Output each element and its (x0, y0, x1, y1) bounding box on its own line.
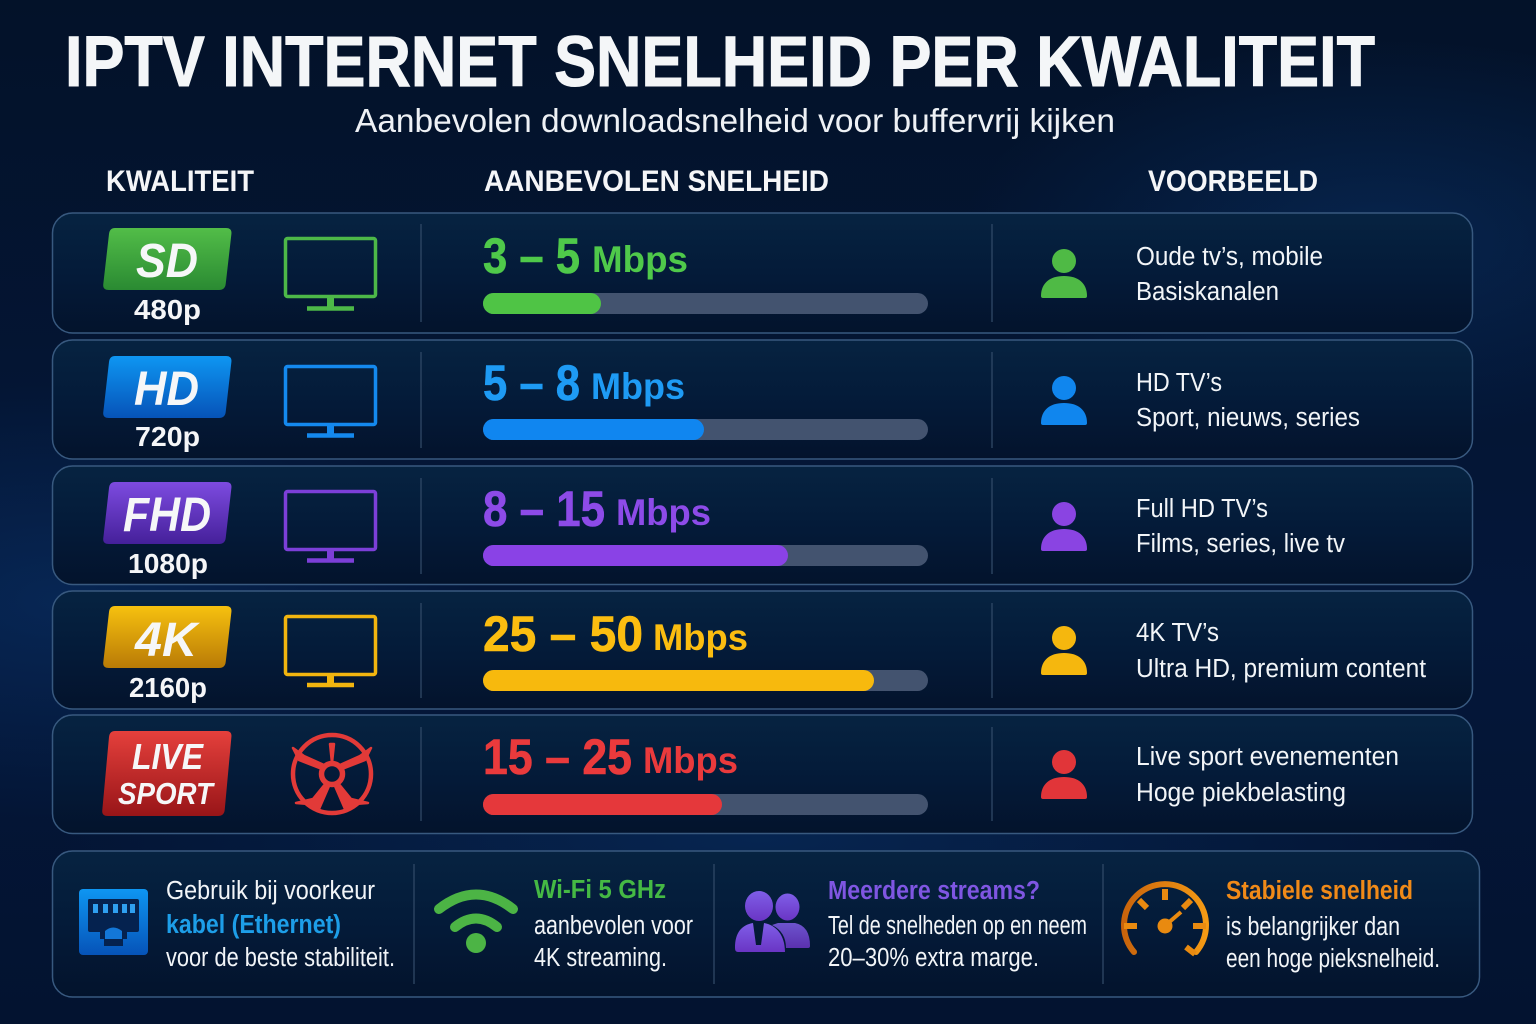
tip: multiple streams: 20–30% extra marge. (828, 944, 1039, 972)
example text: 4K (1136, 619, 1426, 683)
tip: ethernet: Gebruik bij voorkeur (166, 877, 375, 905)
resolution: 2160p: 2160p (129, 672, 207, 703)
example text: FHD (1136, 495, 1345, 558)
badge: FHD: FHD (123, 489, 211, 542)
title: IPTV INTERNET SNELHEID PER KWALITEIT (65, 23, 1375, 102)
speed: 15-25 Mbps: Mbps (643, 740, 738, 781)
icon: green person (1041, 249, 1087, 298)
speed: 3-5 Mbps: Mbps (592, 239, 688, 280)
panel: SD row (52, 213, 1472, 333)
example text: 4K: 4K TV’s (1136, 619, 1219, 647)
example text: 4K: Ultra HD, premium content (1136, 655, 1426, 683)
badge: HD: HD (134, 363, 199, 416)
icon: yellow tv (286, 616, 376, 685)
icon: soccer ball (293, 735, 371, 813)
resolution: 720p: 720p (135, 421, 200, 452)
bar: 15-25 Mbps (483, 794, 928, 815)
example text: FHD: Films, series, live tv (1136, 530, 1345, 558)
speed: 5-8 Mbps: 5 – 8 (483, 355, 580, 411)
badge: HD (103, 356, 231, 418)
speed: 15-25 Mbps (483, 729, 738, 785)
icon: blue person (1041, 376, 1087, 425)
icon: blue tv (286, 366, 376, 436)
icon: red person (1041, 750, 1087, 799)
speed: 25-50 Mbps: Mbps (653, 617, 748, 658)
bar: 25-50 Mbps (483, 670, 928, 691)
speed: 25-50 Mbps: 25 – 50 (483, 606, 643, 662)
speed: 5-8 Mbps (483, 355, 685, 411)
speed: 8-15 Mbps (483, 481, 711, 537)
column headers (106, 165, 1318, 198)
icon: two people (735, 891, 810, 952)
badge: live sport: LIVE (132, 736, 204, 777)
bar: 3-5 Mbps (483, 293, 928, 314)
panel: tips (52, 851, 1480, 997)
example text: HD: HD TV’s (1136, 369, 1222, 397)
panel: 4K row (52, 591, 1472, 709)
example text: SD: Oude tv’s, mobile (1136, 243, 1323, 271)
subtitle: Aanbevolen downloadsnelheid voor buffervrij kijken (355, 102, 1115, 139)
example text: FHD: Full HD TV’s (1136, 495, 1268, 523)
bar: 5-8 Mbps (483, 419, 928, 440)
badge: 4K: 4K (134, 614, 200, 667)
speed: 8-15 Mbps: 8 – 15 (483, 481, 605, 537)
icon: green tv (286, 238, 376, 308)
speed: 15-25 Mbps: 15 – 25 (483, 729, 632, 785)
badge: SD (103, 228, 231, 290)
speed: 3-5 Mbps: 3 – 5 (483, 228, 580, 284)
badge: SD: SD (136, 235, 198, 288)
bar: 8-15 Mbps (483, 545, 928, 566)
tip: stable speed: Stabiele snelheid (1226, 877, 1413, 905)
example text: SD (1136, 243, 1323, 306)
panel: HD row (52, 340, 1472, 459)
icon: wifi (439, 894, 513, 953)
icon: purple person (1041, 502, 1087, 551)
badge: 4K (103, 606, 231, 668)
tip: wifi (534, 876, 693, 972)
tip: multiple streams: Tel de snelheden op en neem (828, 912, 1087, 940)
example text: SD: Basiskanalen (1136, 278, 1279, 306)
icon: speedometer (1124, 884, 1206, 954)
tip: stable speed: een hoge pieksnelheid. (1226, 945, 1440, 973)
icon: ethernet port (79, 889, 148, 955)
badge: live sport (102, 731, 231, 816)
resolution: 480p: 480p (134, 294, 201, 325)
header: kwaliteit: KWALITEIT (106, 165, 254, 198)
speed: 3-5 Mbps (483, 228, 688, 284)
tip: wifi: 4K streaming. (534, 944, 667, 972)
speed: 5-8 Mbps: Mbps (591, 366, 685, 407)
speed: 8-15 Mbps: Mbps (616, 492, 711, 533)
tip: ethernet (166, 877, 395, 972)
tip: wifi: Wi-Fi 5 GHz (534, 876, 666, 904)
example text: HD: Sport, nieuws, series (1136, 404, 1360, 432)
header: aanbevolen snelheid: AANBEVOLEN SNELHEID (484, 165, 829, 198)
example text: live sport: Live sport evenementen (1136, 743, 1399, 771)
badge: FHD (103, 482, 231, 544)
example text: HD (1136, 369, 1360, 432)
tip: wifi: aanbevolen voor (534, 912, 693, 940)
example text: live sport: Hoge piekbelasting (1136, 779, 1346, 807)
header: voorbeeld: VOORBEELD (1148, 165, 1318, 198)
tip: stable speed: is belangrijker dan (1226, 913, 1400, 941)
tip: ethernet: kabel (Ethernet) (166, 911, 341, 939)
badge: live sport: SPORT (118, 776, 216, 811)
resolution: 1080p: 1080p (128, 548, 208, 579)
tip: multiple streams: Meerdere streams? (828, 877, 1040, 905)
panel: live sport row (52, 715, 1472, 834)
tip: ethernet: voor de beste stabiliteit. (166, 944, 395, 972)
tip: stable speed (1226, 877, 1440, 973)
tip: multiple streams (828, 877, 1087, 972)
icon: purple tv (286, 492, 376, 560)
example text: live sport (1136, 743, 1399, 807)
icon: yellow person (1041, 626, 1087, 675)
panel: FHD row (52, 466, 1472, 584)
speed: 25-50 Mbps (483, 606, 748, 662)
